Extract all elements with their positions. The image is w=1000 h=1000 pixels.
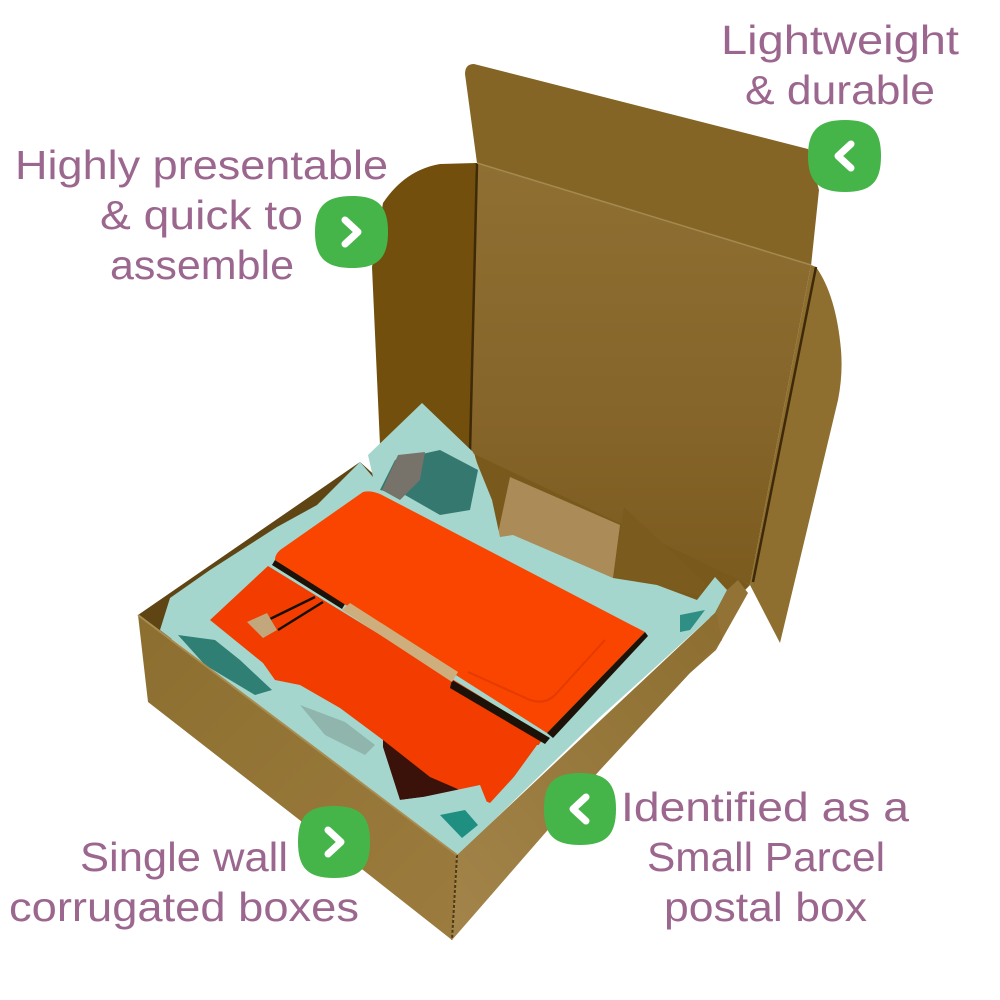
front wall [138,615,457,940]
tissue fold: left corner teal [178,635,272,695]
callout text: Highly presentable [15,142,388,188]
right dust flap [750,265,842,643]
callout: highly presentable & quick to assemble: assemble [110,242,294,288]
right wall [452,612,722,940]
lid crease lines [470,163,816,582]
corner seam [452,855,457,940]
icon: right chevron button [298,806,370,878]
icon: left chevron button [544,773,616,845]
front rim highlight [138,615,457,855]
flap fold [477,163,811,265]
callout text: Lightweight [721,17,960,63]
black gap left of bar [272,560,345,609]
cardboard box [138,64,842,673]
callout: highly presentable & quick to assemble: & quick to [100,192,303,238]
callout: identified as a small parcel postal box: Small Parcel [647,834,885,880]
tan closure bar [342,603,458,682]
tissue fold: right teal [680,610,705,632]
back left rim [138,462,380,640]
icon: right chevron button [315,196,388,268]
callout: single wall corrugated boxes [9,806,370,930]
callout: lightweight & durable: & durable [745,67,935,113]
orange product in box [210,491,648,853]
tissue paper sheet [160,403,727,858]
callout: highly presentable & quick to assemble [15,142,388,288]
callout: single wall corrugated boxes: corrugated boxes [9,884,359,930]
tissue folds: dark teal shadow at back corner [380,450,478,515]
icon: left chevron button [808,120,881,192]
callout: lightweight & durable [721,17,960,192]
top lid flap [465,64,819,266]
embossed flap line [468,640,605,702]
callout text: Identified as a [621,784,909,830]
left dust flap [372,163,476,470]
tissue fold: grey shade on lower sheet [300,705,375,755]
lid main panel [470,163,811,585]
box walls in front [138,612,722,940]
metal clasp [247,613,277,638]
elastic straps [268,597,323,630]
black gap right of bar [450,680,550,744]
lower orange compartment [210,566,545,803]
callout: identified as a small parcel postal box [544,773,909,930]
dark shadow under product [383,738,470,800]
inner corner tab [614,507,705,596]
callout: identified as a small parcel postal box: postal box [664,884,868,930]
back interior of box [470,440,750,620]
back right rim [690,580,748,673]
black inner edge right [547,632,648,738]
tissue paper [160,403,727,858]
tissue overlap bottom right [400,745,545,853]
tissue fold: grey crumple [382,452,425,500]
callout text: Single wall [80,834,288,880]
upper orange compartment [275,491,645,733]
inner tan back panel [497,477,620,578]
tissue overlap bottom right fold [440,810,478,838]
